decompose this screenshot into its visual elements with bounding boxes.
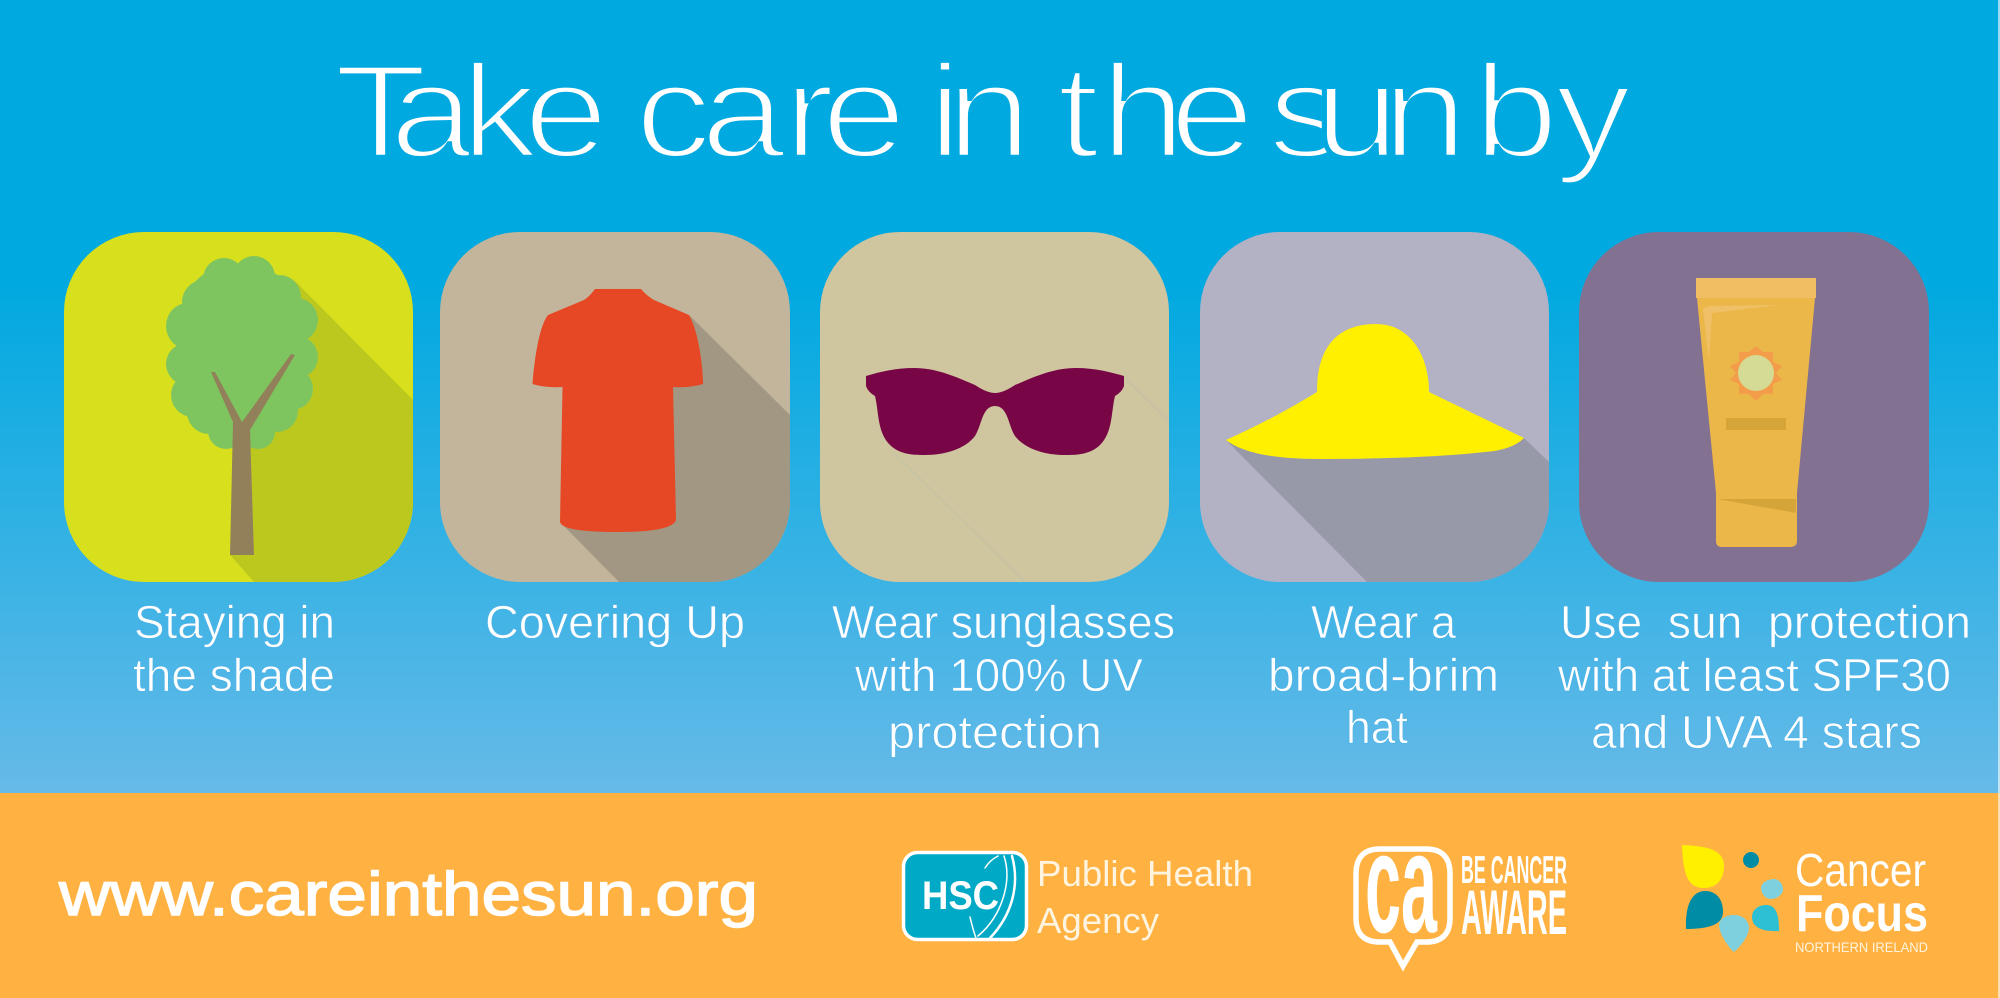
t-shirt shadow [560, 315, 790, 582]
caption: staying in the shade [133, 596, 335, 701]
panel: sun protection [1579, 232, 1929, 582]
footer band: BE CANCER [1461, 849, 1567, 892]
panel: staying in the shade [64, 232, 413, 582]
logo: HSC Public Health Agency: HSC [922, 874, 999, 918]
caption: covering up: Covering Up [485, 596, 745, 648]
panel: sunglasses [820, 232, 1169, 582]
panel: covering up [440, 232, 790, 582]
footer band: AWARE [1461, 878, 1567, 948]
logo: Cancer Focus Northern Ireland: Focus [1796, 885, 1928, 943]
caption: sun protection: Use sun protection [1560, 596, 1971, 648]
icon: broad-brim hat [1226, 324, 1524, 459]
icon: t-shirt [532, 289, 703, 532]
hat shadow [1226, 438, 1549, 582]
logo: Cancer Focus Northern Ireland [1682, 844, 1928, 955]
icon: sunscreen tube [1696, 278, 1816, 547]
caption: hat: broad-brim [1268, 649, 1499, 701]
website address: www.careinthesun.org [58, 860, 758, 928]
logo: Cancer Focus Northern Ireland: NORTHERN IRELAND [1795, 939, 1928, 955]
caption: staying in the shade: Staying in [134, 596, 335, 648]
title: Take care in the sun by [334, 37, 1632, 186]
caption: sun protection: with at least SPF30 [1557, 649, 1951, 701]
caption: sun protection [1557, 596, 1971, 758]
logo: Be Cancer Aware: ca [1365, 804, 1437, 963]
caption: hat [1268, 596, 1499, 753]
logo: HSC Public Health Agency: Agency [1037, 900, 1159, 941]
caption: staying in the shade: the shade [133, 649, 335, 701]
tree shadow [230, 281, 413, 582]
right edge strip [1998, 0, 2000, 998]
icon: sunglasses [866, 368, 1124, 455]
caption: sunglasses: protection [888, 706, 1102, 758]
logo: HSC Public Health Agency [904, 852, 1253, 941]
caption: sun protection: and UVA 4 stars [1591, 706, 1922, 758]
sky background [0, 0, 2000, 793]
caption: sunglasses: with 100% UV [854, 649, 1143, 701]
footer band [0, 793, 2000, 998]
caption: sunglasses [832, 596, 1175, 758]
logo: HSC Public Health Agency: Public Health [1037, 853, 1253, 894]
caption: hat: hat [1346, 701, 1408, 753]
panel: hat [1200, 232, 1549, 582]
caption: sunglasses: Wear sunglasses [832, 596, 1175, 648]
icon: tree [166, 256, 318, 555]
caption: hat: Wear a [1311, 596, 1456, 648]
logo: Cancer Focus Northern Ireland: Cancer [1795, 844, 1926, 896]
